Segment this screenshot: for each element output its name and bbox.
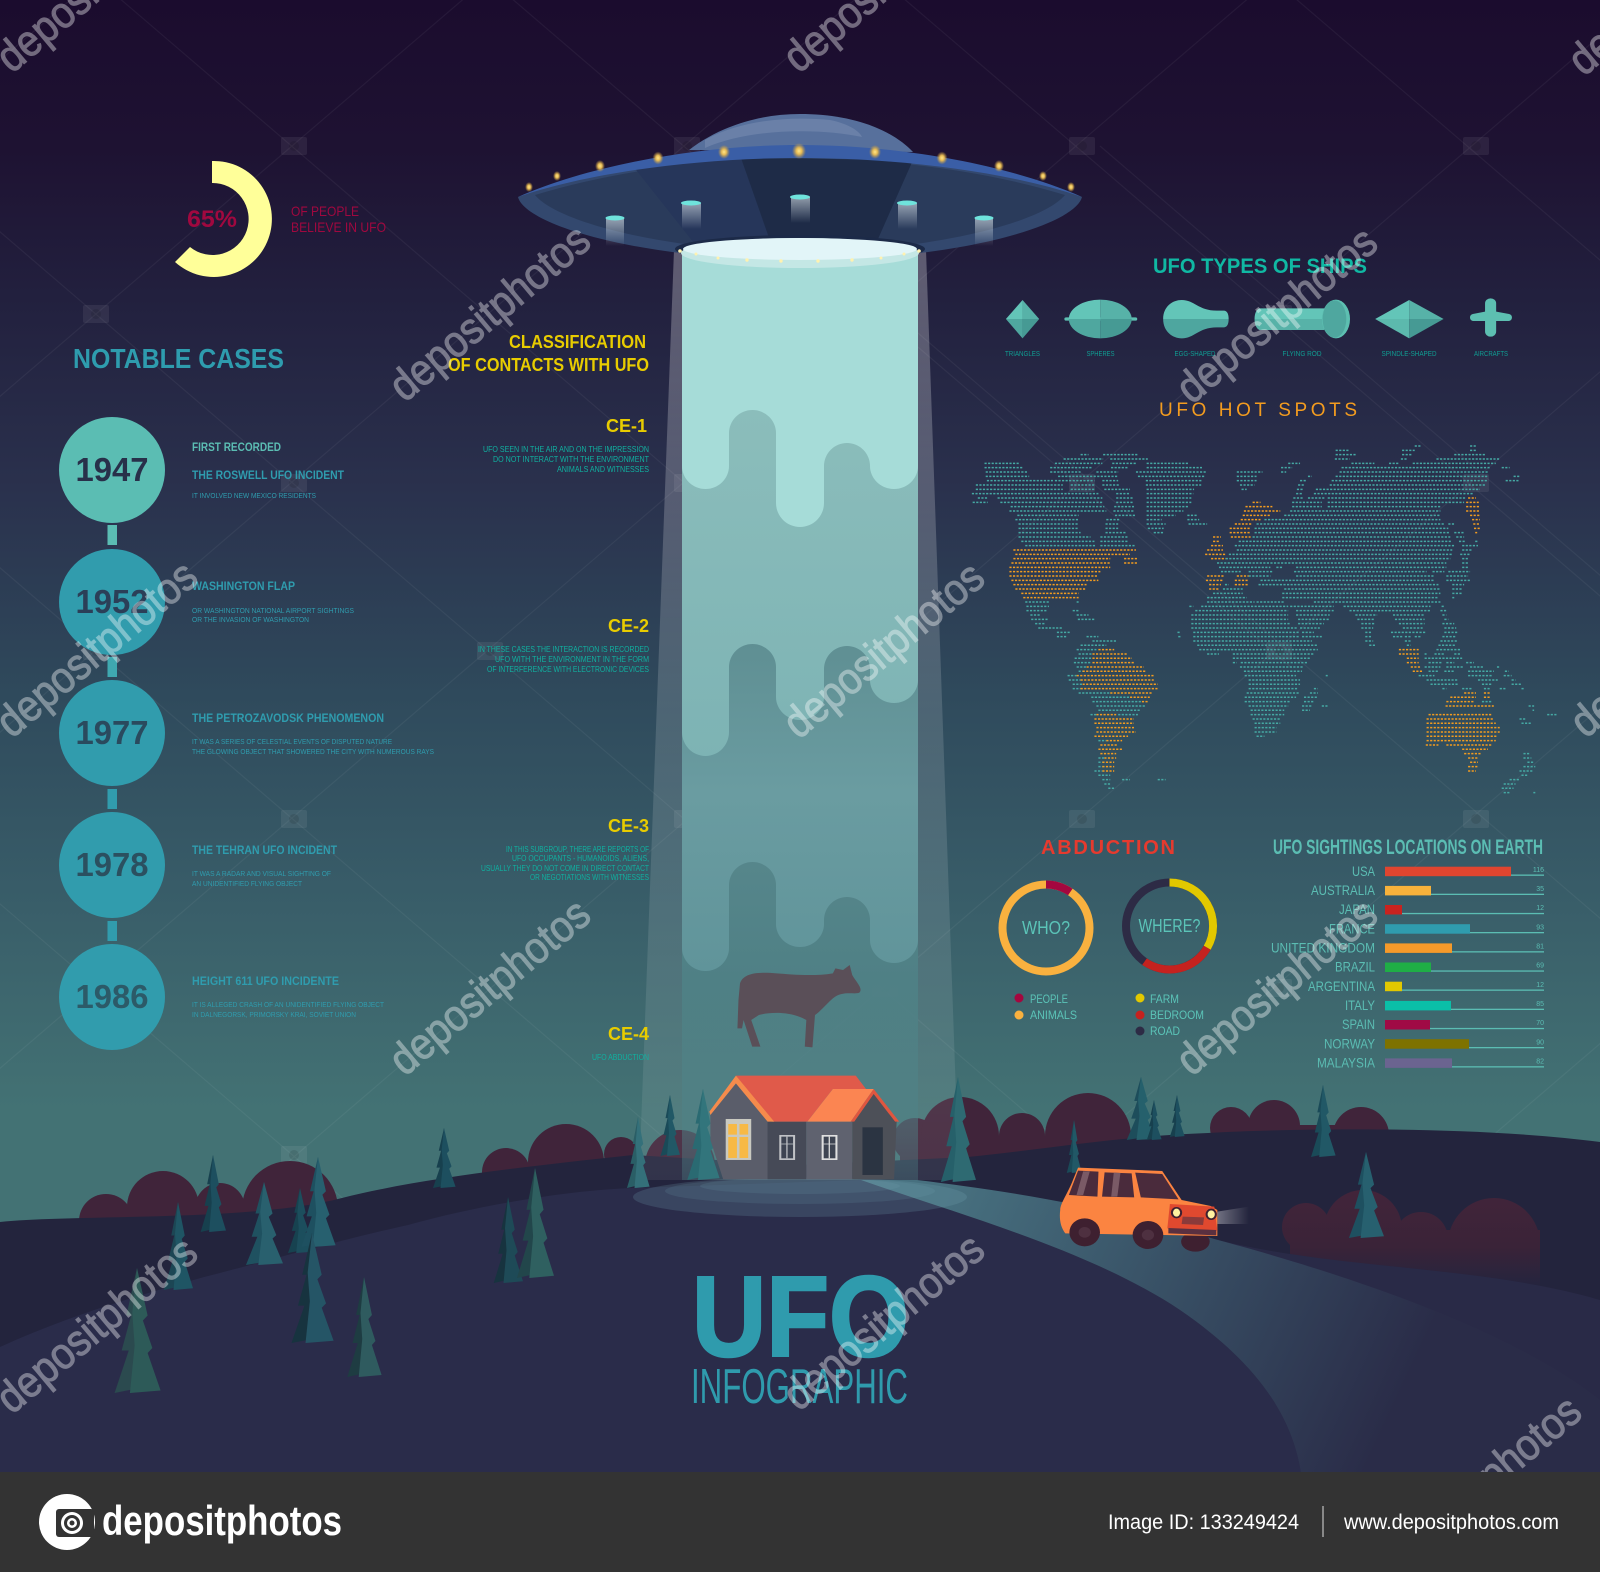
- bar chart: sightings by country: ITALY: [1345, 997, 1376, 1013]
- CE-2: OF INTERFERENCE WITH ELECTRONIC DEVICES: [487, 665, 649, 674]
- case 1952: OR WASHINGTON NATIONAL AIRPORT SIGHTINGS: [192, 606, 354, 615]
- ship labels: SPINDLE-SHAPED: [1382, 351, 1436, 358]
- icon: flying rod: [1255, 300, 1350, 338]
- image id: Image ID: 133249424: [1108, 1511, 1299, 1534]
- title: UFO: UFO: [692, 1254, 909, 1381]
- bar chart: sightings by country: SPAIN: [1342, 1016, 1375, 1032]
- timeline: [59, 417, 434, 1050]
- bar chart: sightings by country: AUSTRALIA: [1311, 882, 1376, 898]
- connectors: [108, 525, 117, 941]
- legend: where: FARM: [1150, 992, 1179, 1006]
- ship labels: EGG-SHAPED: [1174, 351, 1216, 358]
- heading: UFO hot spots: UFO HOT SPOTS: [1159, 400, 1357, 421]
- headlight beam: [1217, 1207, 1249, 1224]
- watermark text: depositphotos: [774, 552, 994, 748]
- outer beam glow: [639, 250, 959, 1180]
- case 1947: 1947: [76, 451, 148, 488]
- classification panel: [448, 332, 649, 1062]
- CE-3: USUALLY THEY DO NOT COME IN DIRECT CONTACT: [481, 864, 649, 873]
- icon: spindle-shaped: [1375, 300, 1444, 338]
- CE-4: CE-4: [608, 1024, 649, 1044]
- foreground hill: [0, 1180, 1302, 1480]
- footer divider: [1322, 1506, 1324, 1537]
- rim band: [518, 145, 1082, 197]
- beam wave layer 3: [682, 644, 918, 975]
- legend: who: [1014, 992, 1077, 1022]
- classification heading: CLASSIFICATION: [509, 332, 646, 352]
- case 1947: IT INVOLVED NEW MEXICO RESIDENTS: [192, 491, 316, 500]
- watermark text: depositphotos: [380, 889, 600, 1085]
- CE-4: [592, 1024, 649, 1062]
- CE-1: [483, 416, 649, 474]
- CE-2: IN THESE CASES THE INTERACTION IS RECORDED: [478, 645, 649, 654]
- bar chart: sightings by country: [1271, 863, 1544, 1070]
- case 1977: 1977: [76, 714, 148, 751]
- watermark text: depositphotos: [1167, 889, 1387, 1085]
- case 1978: [59, 812, 338, 918]
- bar chart: sightings by country: ARGENTINA: [1308, 978, 1376, 994]
- left gable wall: [710, 1083, 772, 1179]
- watermark text: depositphotos: [1167, 217, 1387, 413]
- CE-1: CE-1: [606, 416, 647, 436]
- case 1947: THE ROSWELL UFO INCIDENT: [192, 468, 345, 482]
- bar chart: sightings by country: 12: [1536, 982, 1544, 989]
- bar chart: sightings by country: 82: [1536, 1058, 1544, 1066]
- case 1978: AN UNIDENTIFIED FLYING OBJECT: [192, 879, 302, 888]
- classification heading: [448, 332, 649, 375]
- right lower hill slope: [1218, 1240, 1600, 1480]
- map: hot spot dots: [1009, 498, 1500, 771]
- road: [861, 1180, 1600, 1480]
- bar chart: sightings by country: 12: [1536, 905, 1544, 912]
- classification heading: OF CONTACTS WITH UFO: [448, 355, 649, 375]
- icon: egg-shaped: [1163, 300, 1229, 338]
- icon: aircrafts: [1470, 298, 1512, 337]
- case 1978: THE TEHRAN UFO INCIDENT: [192, 843, 338, 857]
- case 1952: [59, 549, 354, 655]
- legend: where: [1136, 992, 1204, 1038]
- front roof: [807, 1089, 874, 1122]
- CE-1: ANIMALS AND WITNESSES: [557, 465, 649, 474]
- donut: where: [1126, 882, 1213, 970]
- bushes on right hill: [1282, 1190, 1540, 1290]
- roof edge left: [709, 1076, 774, 1122]
- roof edge right: [851, 1089, 899, 1122]
- ship labels: SPHERES: [1086, 351, 1115, 358]
- heading: UFO types of ships: UFO TYPES OF SHIPS: [1153, 255, 1367, 278]
- icon: triangles: [1006, 300, 1039, 338]
- bar chart: sightings by country: JAPAN: [1339, 901, 1375, 917]
- bumper: [1168, 1228, 1216, 1235]
- case 1952: OR THE INVASION OF WASHINGTON: [192, 615, 309, 624]
- case 1986: HEIGHT 611 UFO INCIDENTE: [192, 974, 339, 988]
- rim lights: [525, 143, 1075, 192]
- case 1977: [59, 680, 434, 786]
- back hill: [0, 1129, 1600, 1480]
- main roof: [736, 1076, 866, 1122]
- watermark text: depositphotos: [380, 215, 600, 411]
- small window 2: [822, 1135, 837, 1160]
- icon: logo camera: [39, 1494, 95, 1550]
- CE-3: IN THIS SUBGROUP, THERE ARE REPORTS OF: [506, 845, 649, 854]
- caption: [291, 203, 386, 235]
- far wheel: [1181, 1232, 1210, 1252]
- case 1978: 1978: [76, 846, 148, 883]
- website: www.depositphotos.com: [1343, 1511, 1559, 1534]
- donut: where: WHERE?: [1138, 916, 1200, 936]
- case 1977: IT WAS A SERIES OF CELESTIAL EVENTS OF DISPUTED NATURE: [192, 737, 392, 746]
- case 1986: IT IS ALLEGED CRASH OF AN UNIDENTIFIED FLYING OBJECT: [192, 1000, 384, 1009]
- ship labels: [1005, 351, 1508, 358]
- CE-1: UFO SEEN IN THE AIR AND ON THE IMPRESSION: [483, 445, 649, 454]
- case 1947: FIRST RECORDED: [192, 440, 281, 454]
- percentage: 65%: [187, 206, 237, 233]
- beam emitter: [675, 235, 925, 263]
- heading: notable cases: NOTABLE CASES: [73, 343, 284, 374]
- bar chart: sightings by country: 69: [1536, 962, 1544, 970]
- front wall: [806, 1122, 852, 1179]
- beam wave layer 2: [682, 410, 918, 760]
- ship labels: FLYING ROD: [1282, 351, 1322, 358]
- trees: [115, 1077, 1384, 1393]
- legend: who: ANIMALS: [1030, 1008, 1077, 1022]
- bar chart: sightings by country: 81: [1536, 944, 1544, 950]
- car body: [1060, 1168, 1217, 1236]
- legend: where: BEDROOM: [1150, 1008, 1204, 1022]
- bar chart: sightings by country: 85: [1536, 1001, 1544, 1008]
- legend: where: ROAD: [1150, 1024, 1180, 1038]
- UFO ship: [518, 114, 1082, 268]
- bar chart: sightings by country: USA: [1352, 863, 1376, 879]
- donut: who: WHO?: [1022, 918, 1070, 938]
- CE-1: DO NOT INTERACT WITH THE ENVIRONMENT: [493, 455, 649, 464]
- icon: spheres: [1064, 300, 1137, 338]
- icon: cow in beam: [737, 965, 861, 1047]
- map: land dots: [972, 446, 1557, 793]
- watermark text: depositphotos: [774, 1224, 994, 1420]
- house: [709, 1076, 899, 1179]
- case 1947: [59, 417, 345, 523]
- legend: who: PEOPLE: [1030, 992, 1068, 1006]
- wheels: [1069, 1218, 1100, 1246]
- bar chart: sightings by country: 116: [1533, 867, 1544, 874]
- CE-3: [481, 816, 649, 882]
- bar chart: sightings by country: MALAYSIA: [1317, 1054, 1376, 1070]
- CE-2: [478, 616, 649, 674]
- case 1977: THE PETROZAVODSK PHENOMENON: [192, 711, 384, 725]
- CE-3: CE-3: [608, 816, 649, 836]
- abduction heading: ABDUCTION: [1041, 837, 1175, 859]
- dotted world map: [972, 446, 1557, 793]
- bar chart: sightings by country: 93: [1536, 924, 1544, 932]
- CE-2: UFO WITH THE ENVIRONMENT IN THE FORM: [495, 655, 649, 664]
- bar chart: sightings by country: BRAZIL: [1335, 958, 1375, 974]
- donut: 65% believe: [175, 161, 386, 277]
- middle wall: [768, 1122, 806, 1179]
- donut: who: [1002, 884, 1090, 972]
- case 1978: IT WAS A RADAR AND VISUAL SIGHTING OF: [192, 869, 331, 878]
- donut arc: [175, 161, 272, 277]
- subtitle: INFOGRAPHIC: INFOGRAPHIC: [691, 1360, 908, 1414]
- bar chart: sightings by country: UNITED KINGDOM: [1271, 940, 1375, 956]
- CE-3: UFO OCCUPANTS - HUMANOIDS, ALIENS,: [512, 854, 649, 863]
- car windows: [1069, 1171, 1179, 1199]
- case 1977: THE GLOWING OBJECT THAT SHOWERED THE CITY WITH NUMEROUS RAYS: [192, 747, 434, 756]
- logo wordmark: depositphotos: [102, 1497, 342, 1544]
- ship type icons: [1005, 298, 1512, 358]
- bar chart: sightings by country: 35: [1536, 886, 1544, 893]
- case 1986: IN DALNEGORSK, PRIMORSKY KRAI, SOVIET UNION: [192, 1010, 356, 1019]
- abduction panel: [1002, 837, 1213, 1038]
- right wing: [852, 1090, 897, 1179]
- tractor beam: [639, 250, 959, 1180]
- caption: OF PEOPLE: [291, 203, 359, 219]
- bar chart: sightings by country: NORWAY: [1324, 1036, 1376, 1052]
- CE-3: OR NEGOTIATIONS WITH WITNESSES: [530, 873, 649, 882]
- case 1952: WASHINGTON FLAP: [192, 579, 295, 593]
- small window 1: [779, 1135, 795, 1160]
- case 1986: 1986: [76, 978, 148, 1015]
- beam wave layer 4: [682, 862, 918, 1180]
- CE-4: UFO ABDUCTION: [592, 1053, 649, 1062]
- ground light rings: [633, 1177, 967, 1217]
- ship labels: TRIANGLES: [1005, 351, 1040, 358]
- car: [1060, 1168, 1249, 1252]
- front grille panel: [1167, 1204, 1217, 1231]
- case 1986: [59, 944, 384, 1050]
- bar chart: sightings by country: 90: [1536, 1040, 1544, 1046]
- beam base layer: [682, 255, 918, 530]
- hull: [518, 150, 1082, 260]
- lit window: [726, 1119, 751, 1160]
- ship labels: AIRCRAFTS: [1474, 351, 1508, 358]
- footer bar: [0, 1472, 1600, 1572]
- caption: BELIEVE IN UFO: [291, 219, 386, 235]
- bar chart: sightings by country: FRANCE: [1329, 920, 1375, 936]
- dome: [689, 114, 913, 152]
- door: [862, 1127, 883, 1175]
- headlights: [1171, 1207, 1182, 1218]
- distant bushes: [79, 1093, 1389, 1257]
- CE-2: CE-2: [608, 616, 649, 636]
- bar chart: sightings by country: 70: [1536, 1020, 1544, 1027]
- case 1952: 1952: [76, 583, 148, 620]
- engine lights: [606, 194, 994, 246]
